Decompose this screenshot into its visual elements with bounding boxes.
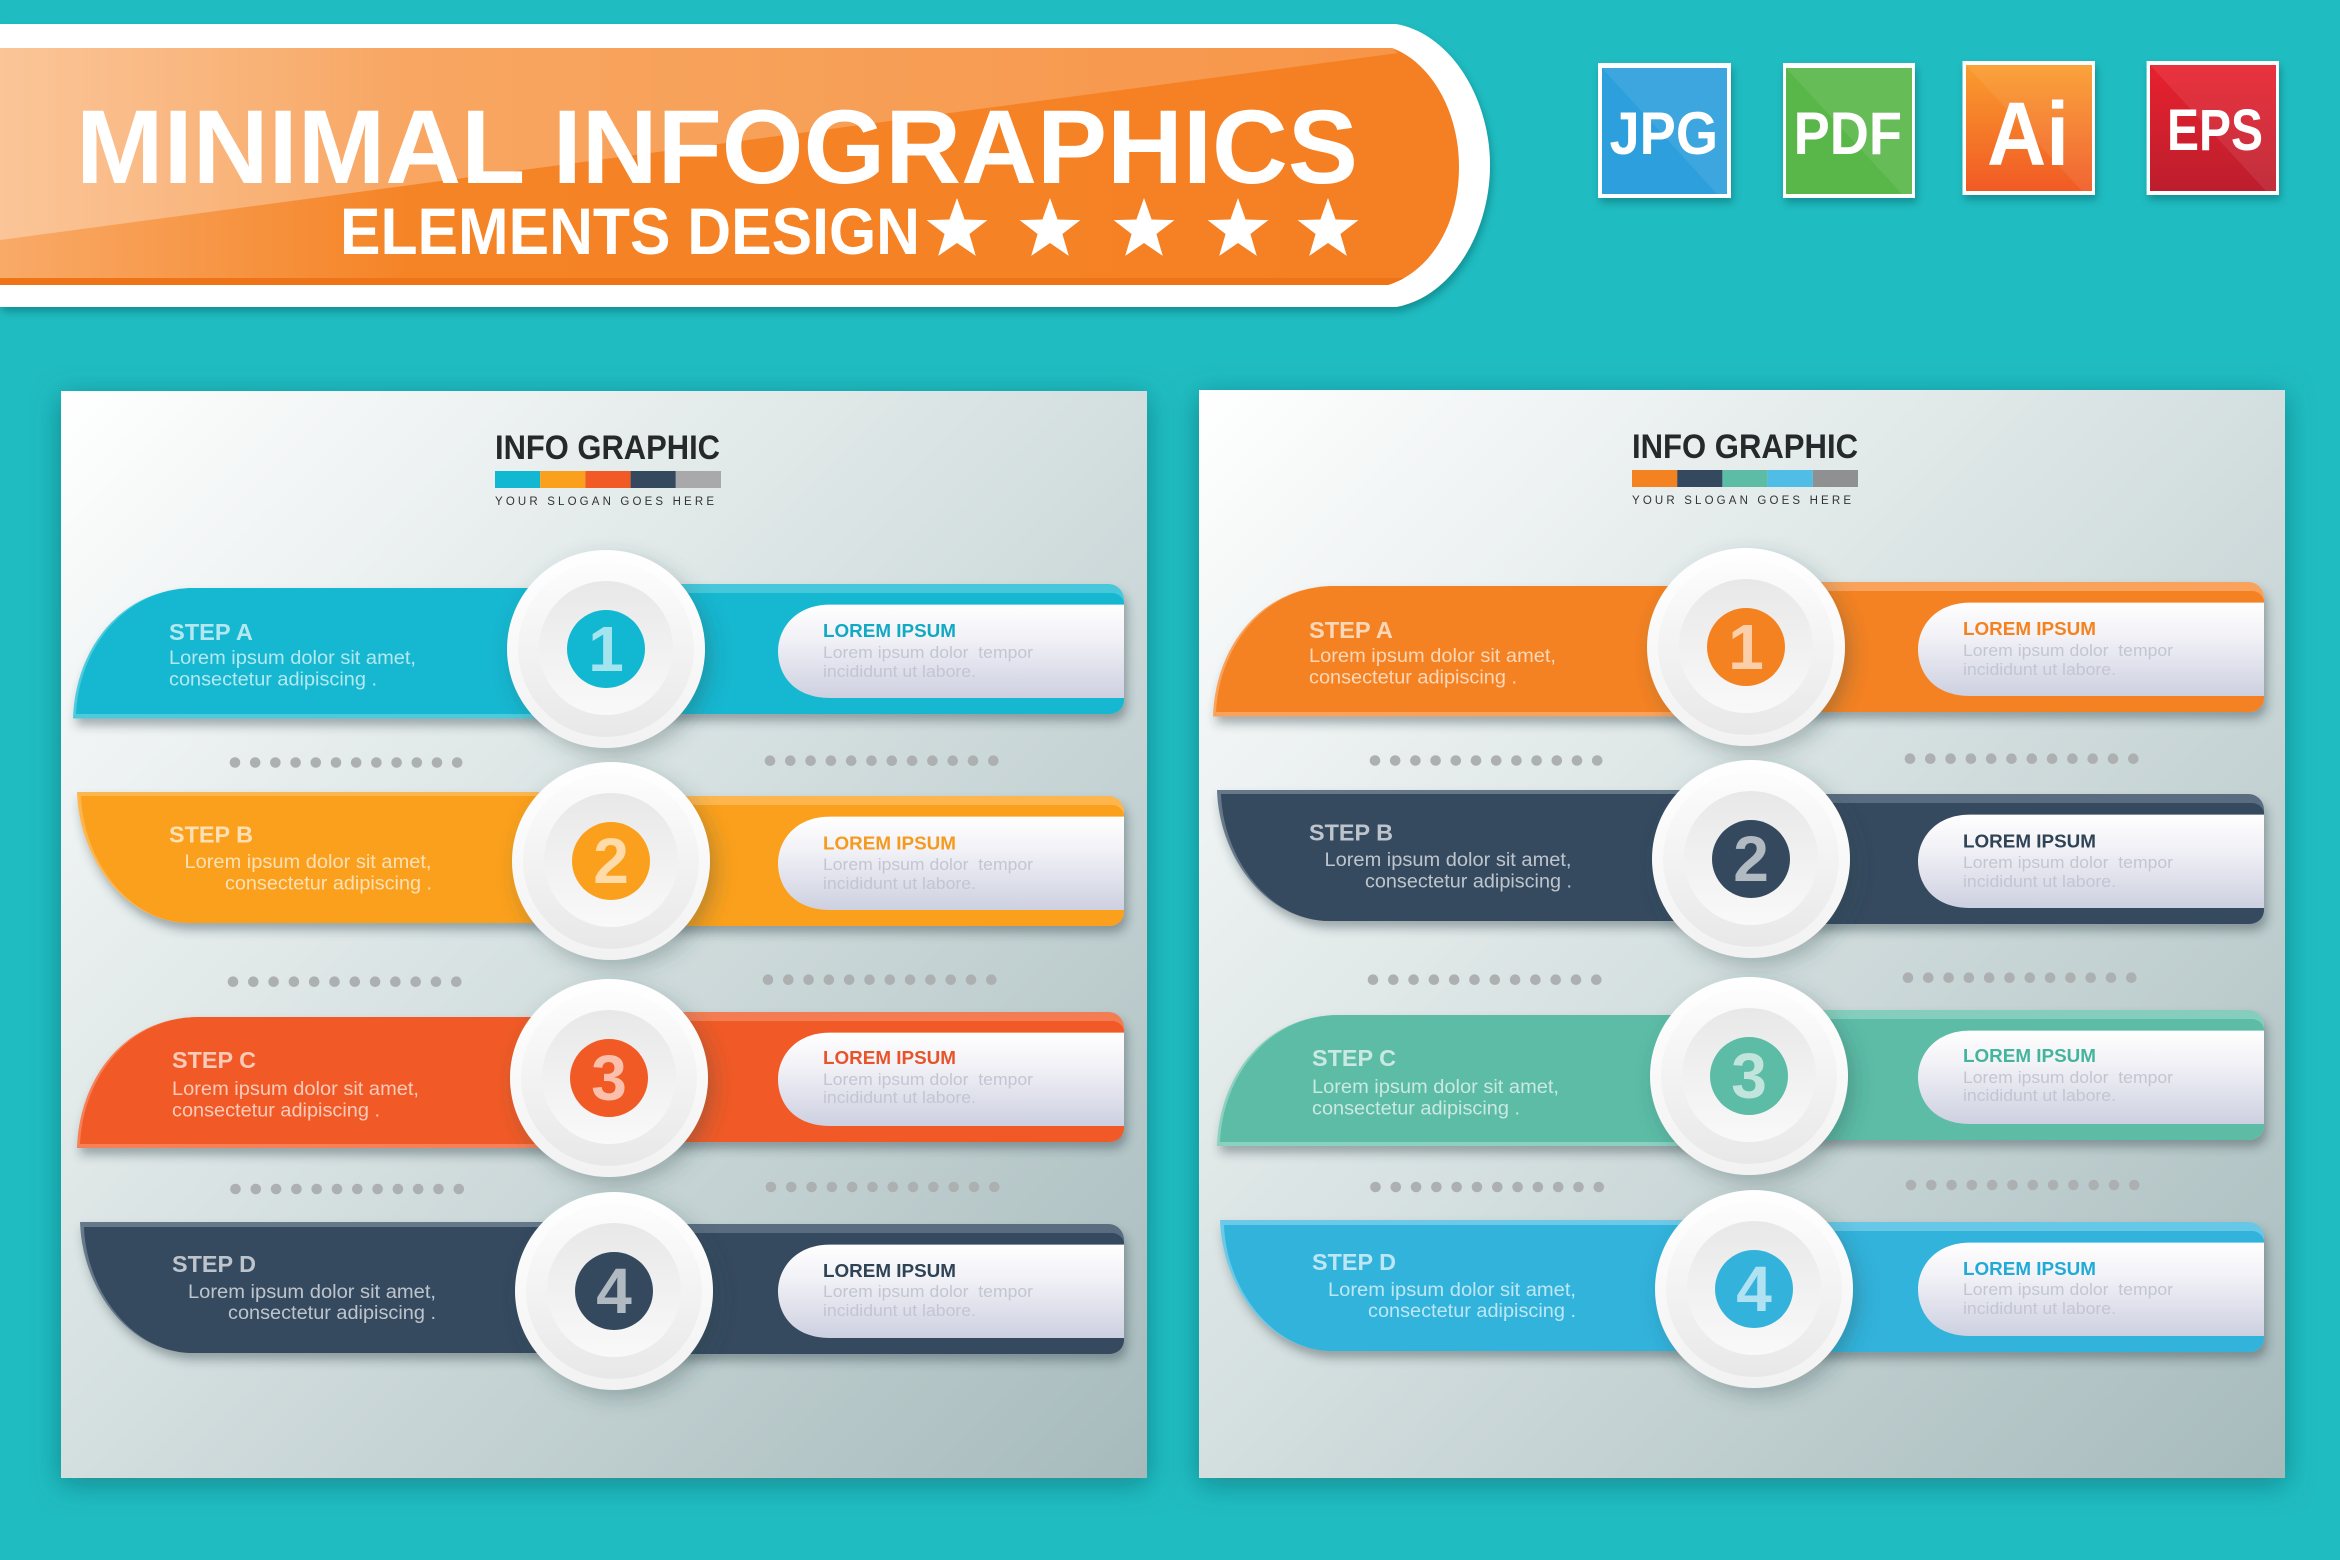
detail pill: Lorem ipsum dolor tempor	[1963, 1069, 2174, 1087]
heading: INFO GRAPHIC	[1632, 428, 1858, 466]
left text: STEP B	[1309, 820, 1393, 846]
banner title: MINIMAL INFOGRAPHICS	[76, 89, 1358, 206]
dots row 1 right	[765, 755, 999, 766]
number badge 2	[512, 762, 710, 960]
panel background	[61, 391, 1147, 1478]
left band	[1217, 1015, 1757, 1146]
detail pill: Lorem ipsum dolor tempor	[1963, 1281, 2174, 1299]
dots row 3 left	[230, 1184, 464, 1194]
left text: consectetur adipiscing .	[172, 1100, 380, 1122]
header banner	[0, 24, 1490, 307]
number badge 4: 4	[596, 1255, 632, 1327]
number badge 3	[1650, 977, 1848, 1175]
left text: consectetur adipiscing .	[1368, 1301, 1576, 1322]
right band	[1740, 794, 2264, 924]
left text	[1312, 1045, 1559, 1120]
left band	[1213, 586, 1753, 716]
detail pill	[778, 1245, 1124, 1338]
number badge 3: 3	[591, 1042, 627, 1114]
colour bar	[495, 471, 721, 488]
dots row 1 right	[1905, 753, 2139, 764]
left text: consectetur adipiscing .	[228, 1303, 436, 1324]
left text	[1312, 1249, 1576, 1322]
detail pill: LOREM IPSUM	[823, 620, 956, 641]
left text: Lorem ipsum dolor sit amet,	[169, 648, 416, 669]
banner orange body	[0, 48, 1459, 285]
dots row 2 left	[1368, 974, 1602, 985]
right band	[1740, 582, 2264, 712]
number badge 4	[515, 1192, 713, 1390]
left text: Lorem ipsum dolor sit amet,	[1312, 1077, 1559, 1098]
heading: INFO GRAPHIC	[495, 429, 720, 467]
slogan: YOUR SLOGAN GOES HERE	[1632, 495, 1851, 507]
dots row 2 right	[763, 974, 997, 985]
detail pill	[1918, 815, 2264, 908]
left text: Lorem ipsum dolor sit amet,	[1324, 850, 1572, 871]
detail pill: incididunt ut labore.	[823, 875, 976, 893]
number badge 1	[507, 550, 705, 748]
dots row 3 right	[1906, 1180, 2140, 1190]
number badge 3: 3	[1731, 1040, 1767, 1112]
row: step A	[73, 550, 1124, 748]
detail pill	[778, 817, 1124, 910]
detail pill: Lorem ipsum dolor tempor	[1963, 854, 2174, 872]
dots row 3 right	[766, 1182, 1000, 1192]
detail pill: LOREM IPSUM	[1963, 1045, 2096, 1066]
left band	[1217, 790, 1757, 921]
left text: Lorem ipsum dolor sit amet,	[1309, 646, 1556, 667]
left band	[1220, 1220, 1760, 1351]
number badge 3	[510, 979, 708, 1177]
row: step D	[1220, 1190, 2264, 1388]
left text: consectetur adipiscing .	[1365, 872, 1572, 892]
detail pill	[1918, 1243, 2264, 1336]
left text: Lorem ipsum dolor sit amet,	[184, 852, 432, 873]
banner gloss	[0, 48, 1398, 240]
detail pill: incididunt ut labore.	[1963, 873, 2116, 891]
icon: EPS	[2147, 61, 2279, 195]
panel background	[1199, 390, 2285, 1478]
left band	[77, 792, 617, 923]
detail pill: LOREM IPSUM	[1963, 618, 2096, 639]
right band	[600, 1224, 1124, 1354]
detail pill: Lorem ipsum dolor tempor	[1963, 642, 2174, 660]
detail pill: Lorem ipsum dolor tempor	[823, 1283, 1034, 1301]
right band	[600, 1012, 1124, 1142]
dots row 2 right	[1903, 972, 2137, 983]
detail pill: Lorem ipsum dolor tempor	[823, 1071, 1034, 1089]
icon: PDF: PDF	[1794, 100, 1902, 167]
detail pill: LOREM IPSUM	[1963, 830, 2096, 852]
left text	[1309, 617, 1556, 688]
left band	[77, 1017, 617, 1148]
detail pill	[1918, 603, 2264, 696]
detail pill	[778, 605, 1124, 698]
icon: JPG: JPG	[1610, 100, 1718, 167]
left text: consectetur adipiscing .	[225, 874, 432, 894]
left text	[169, 619, 416, 690]
icon: JPG	[1598, 63, 1731, 198]
number badge 1	[1647, 548, 1845, 746]
number badge 2: 2	[1733, 823, 1769, 895]
icon: Ai	[1962, 61, 2095, 195]
left text: STEP A	[1309, 617, 1393, 643]
detail pill: Lorem ipsum dolor tempor	[823, 856, 1034, 874]
left text: Lorem ipsum dolor sit amet,	[188, 1282, 436, 1303]
banner lower edge	[0, 278, 1459, 285]
left text: STEP A	[169, 619, 253, 645]
detail pill: LOREM IPSUM	[823, 1047, 956, 1068]
icon: PDF	[1783, 63, 1915, 198]
detail pill: Lorem ipsum dolor tempor	[823, 644, 1034, 662]
left band	[80, 1222, 620, 1353]
row: step A	[1213, 548, 2264, 746]
detail pill: LOREM IPSUM	[1963, 1258, 2096, 1279]
panel: left infographic card	[61, 391, 1147, 1478]
icon: Ai: Ai	[1987, 85, 2069, 185]
dots row 3 left	[1370, 1182, 1604, 1192]
colour bar	[1632, 470, 1858, 487]
detail pill: incididunt ut labore.	[823, 663, 976, 681]
panel: right infographic card	[1199, 390, 2285, 1478]
left text: consectetur adipiscing .	[1312, 1098, 1520, 1120]
number badge 4	[1655, 1190, 1853, 1388]
detail pill	[1918, 1031, 2264, 1124]
left text	[172, 1251, 436, 1324]
left text	[169, 822, 432, 894]
left text: consectetur adipiscing .	[1309, 668, 1517, 688]
left text: STEP C	[172, 1047, 256, 1073]
dots row 2 left	[228, 976, 462, 987]
left text: Lorem ipsum dolor sit amet,	[1328, 1280, 1576, 1301]
number badge 1: 1	[588, 613, 624, 685]
detail pill: LOREM IPSUM	[823, 832, 956, 854]
detail pill: incididunt ut labore.	[1963, 661, 2116, 679]
number badge 2: 2	[593, 825, 629, 897]
left text: STEP B	[169, 822, 253, 848]
dots row 1 left	[230, 757, 463, 768]
rating stars	[927, 198, 1358, 256]
number badge 4: 4	[1736, 1253, 1772, 1325]
row: step B	[1217, 760, 2264, 958]
detail pill: LOREM IPSUM	[823, 1260, 956, 1281]
left band	[73, 588, 613, 718]
detail pill	[778, 1033, 1124, 1126]
detail pill: incididunt ut labore.	[823, 1302, 976, 1320]
detail pill: incididunt ut labore.	[823, 1089, 976, 1107]
row: step D	[80, 1192, 1124, 1390]
row: step B	[77, 762, 1124, 960]
left text	[1309, 820, 1572, 892]
left text: Lorem ipsum dolor sit amet,	[172, 1079, 419, 1100]
left text	[172, 1047, 419, 1122]
number badge 1: 1	[1728, 611, 1764, 683]
row: step C	[1217, 977, 2264, 1175]
left text: consectetur adipiscing .	[169, 670, 377, 690]
right band	[1740, 1010, 2264, 1140]
right band	[600, 584, 1124, 714]
detail pill: incididunt ut labore.	[1963, 1300, 2116, 1318]
dots row 1 left	[1370, 755, 1602, 766]
left text: STEP D	[172, 1251, 256, 1277]
slogan: YOUR SLOGAN GOES HERE	[495, 496, 714, 508]
row: step C	[77, 979, 1124, 1177]
left text: STEP C	[1312, 1045, 1396, 1071]
number badge 2	[1652, 760, 1850, 958]
banner subtitle: ELEMENTS DESIGN	[340, 194, 920, 268]
icon: EPS: EPS	[2167, 98, 2263, 163]
right band	[600, 796, 1124, 926]
right band	[1740, 1222, 2264, 1352]
left text: STEP D	[1312, 1249, 1396, 1275]
banner white outline	[0, 24, 1490, 307]
detail pill: incididunt ut labore.	[1963, 1087, 2116, 1105]
